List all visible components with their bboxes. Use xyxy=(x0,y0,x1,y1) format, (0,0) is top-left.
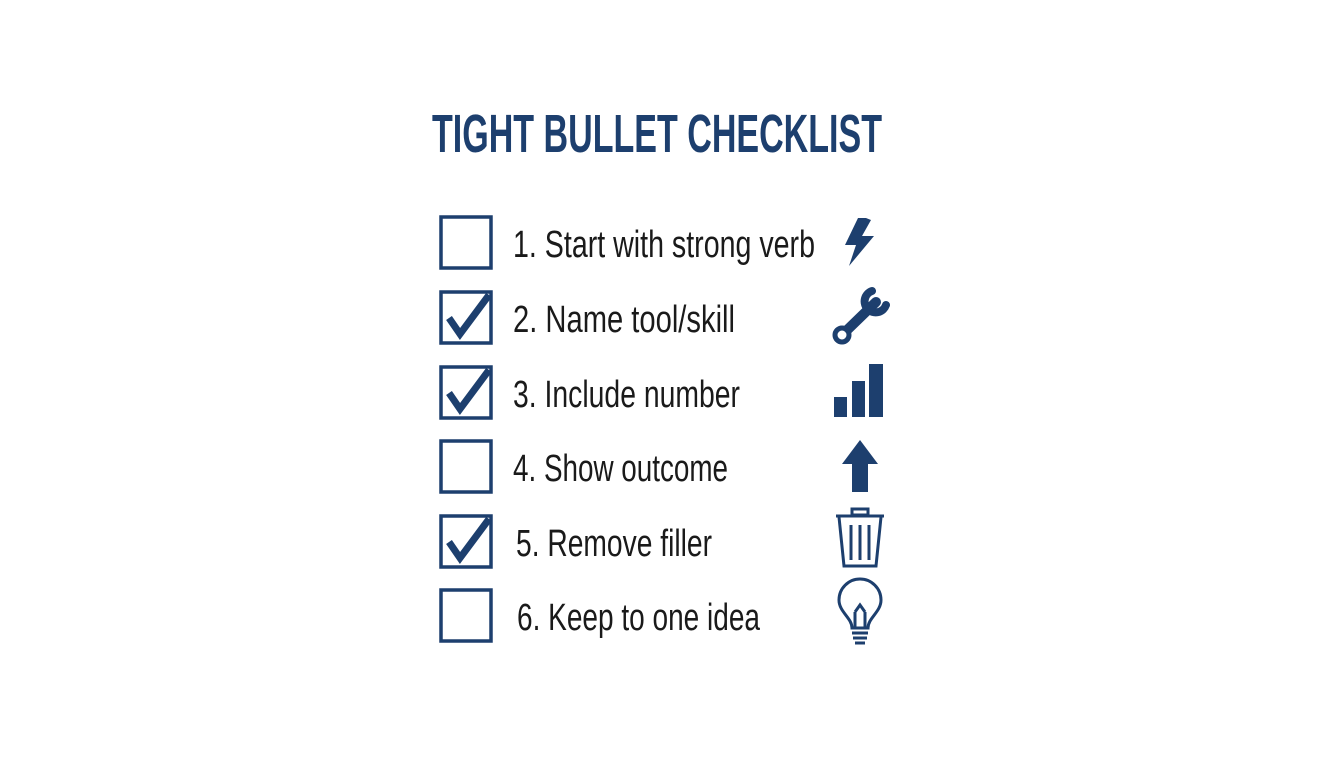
item 5: 5. Remove filler xyxy=(516,523,712,565)
item 4 xyxy=(441,441,728,492)
item 1 xyxy=(441,217,815,268)
item 5 xyxy=(441,516,712,567)
item 6 xyxy=(441,590,761,641)
item 1: 1. Start with strong verb xyxy=(513,224,815,266)
icon: wrench xyxy=(835,291,886,342)
icon: up arrow xyxy=(842,440,878,492)
item 3: 3. Include number xyxy=(513,374,740,416)
icon: lightning xyxy=(845,218,874,266)
icon: light bulb xyxy=(839,579,881,643)
item 3 xyxy=(441,367,740,418)
checklist xyxy=(441,217,815,641)
icon: trash can xyxy=(836,509,884,566)
icon: bar chart xyxy=(834,364,883,417)
item 2 xyxy=(441,292,735,343)
item 4: 4. Show outcome xyxy=(513,448,728,490)
title: TIGHT BULLET CHECKLIST xyxy=(432,104,882,164)
item 2: 2. Name tool/skill xyxy=(513,299,735,341)
item 6: 6. Keep to one idea xyxy=(517,597,761,639)
